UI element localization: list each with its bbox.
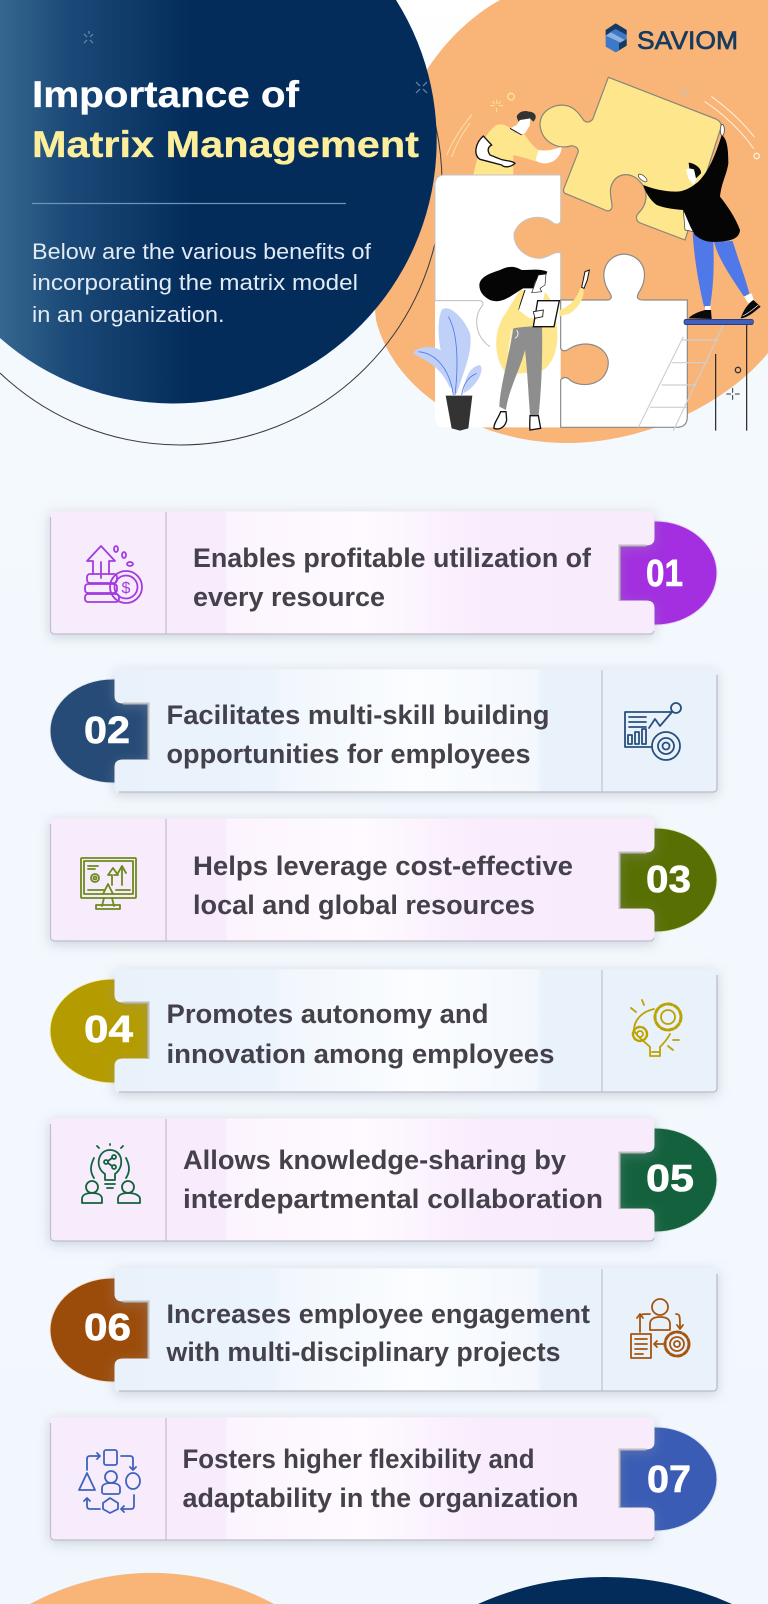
card 02: 02 bbox=[84, 710, 130, 752]
text: card 05: interdepartmental collaboration bbox=[183, 1184, 603, 1214]
ladder and stool bbox=[638, 319, 753, 431]
man left bbox=[473, 111, 562, 175]
text: card 04: innovation among employees bbox=[166, 1039, 554, 1069]
intro text bbox=[32, 239, 372, 327]
text: card 06 bbox=[165, 1299, 590, 1367]
card 07 bbox=[50, 1417, 717, 1540]
intro text: in an organization. bbox=[32, 302, 224, 327]
title bbox=[32, 74, 419, 165]
bottom orange circle bbox=[30, 1573, 274, 1604]
intro text: incorporating the matrix model bbox=[32, 270, 358, 295]
icon: engagement workflow bbox=[631, 1299, 689, 1358]
card 05 bbox=[50, 1118, 717, 1241]
thin outline circle bbox=[0, 0, 442, 445]
card 01: 01 bbox=[646, 553, 683, 595]
logo: Saviom: SAVIOM bbox=[637, 27, 738, 55]
title: Importance of bbox=[32, 74, 300, 115]
text: card 02: opportunities for employees bbox=[166, 739, 530, 769]
text: card 03 bbox=[193, 851, 573, 920]
card 04 bbox=[50, 969, 717, 1092]
text: card 06: Increases employee engagement bbox=[166, 1299, 590, 1329]
text: card 07: adaptability in the organization bbox=[182, 1483, 578, 1513]
sparkles on navy bbox=[84, 31, 427, 93]
navy circle bbox=[0, 0, 437, 403]
white puzzle piece top bbox=[435, 175, 561, 302]
card 04: 04 bbox=[84, 1009, 133, 1051]
icon: knowledge sharing bbox=[82, 1144, 140, 1203]
text: card 03: local and global resources bbox=[193, 890, 535, 920]
icon: dashboard chart bbox=[625, 703, 681, 760]
icon: flexible process bbox=[79, 1450, 140, 1513]
text: card 01: Enables profitable utilization of bbox=[193, 543, 591, 573]
intro text: Below are the various benefits of bbox=[32, 239, 372, 264]
card 03: 03 bbox=[646, 859, 691, 901]
yellow puzzle piece bbox=[540, 77, 721, 240]
card 06 bbox=[50, 1268, 717, 1391]
text: card 04 bbox=[166, 999, 554, 1069]
icon: coins and arrow: $ bbox=[122, 580, 131, 597]
orange blob bbox=[373, 0, 768, 443]
potted plant bbox=[413, 308, 481, 431]
icon: coins and arrow bbox=[85, 546, 142, 603]
man right bbox=[637, 124, 761, 319]
text: card 03: Helps leverage cost-effective bbox=[193, 851, 573, 881]
card 06: 06 bbox=[84, 1307, 131, 1349]
text: card 07 bbox=[182, 1444, 578, 1513]
card 03 bbox=[50, 818, 717, 941]
text: card 05 bbox=[183, 1145, 603, 1214]
text: card 05: Allows knowledge-sharing by bbox=[183, 1145, 566, 1175]
card 01 bbox=[50, 511, 717, 634]
text: card 02: Facilitates multi-skill building bbox=[166, 700, 550, 730]
text: card 02 bbox=[166, 700, 550, 769]
card 05: 05 bbox=[646, 1158, 694, 1200]
icon: bulb with gears bbox=[631, 1000, 681, 1056]
bottom navy circle bbox=[478, 1577, 732, 1604]
text: card 06: with multi-disciplinary projects bbox=[165, 1337, 560, 1367]
text: card 01 bbox=[193, 543, 591, 612]
illustration: puzzle team bbox=[413, 77, 761, 431]
icon: monitor bbox=[81, 858, 136, 909]
woman with tablet bbox=[479, 267, 589, 430]
text: card 04: Promotes autonomy and bbox=[166, 999, 488, 1029]
text: card 07: Fosters higher flexibility and bbox=[182, 1444, 534, 1474]
decorative marks bbox=[447, 86, 759, 399]
white puzzle piece bottom left bbox=[435, 300, 561, 427]
card 02 bbox=[50, 669, 717, 792]
card 07: 07 bbox=[647, 1459, 691, 1501]
title: Matrix Management bbox=[32, 124, 419, 165]
text: card 01: every resource bbox=[193, 582, 385, 612]
logo: Saviom bbox=[606, 23, 738, 55]
white puzzle piece bottom right bbox=[561, 254, 687, 427]
